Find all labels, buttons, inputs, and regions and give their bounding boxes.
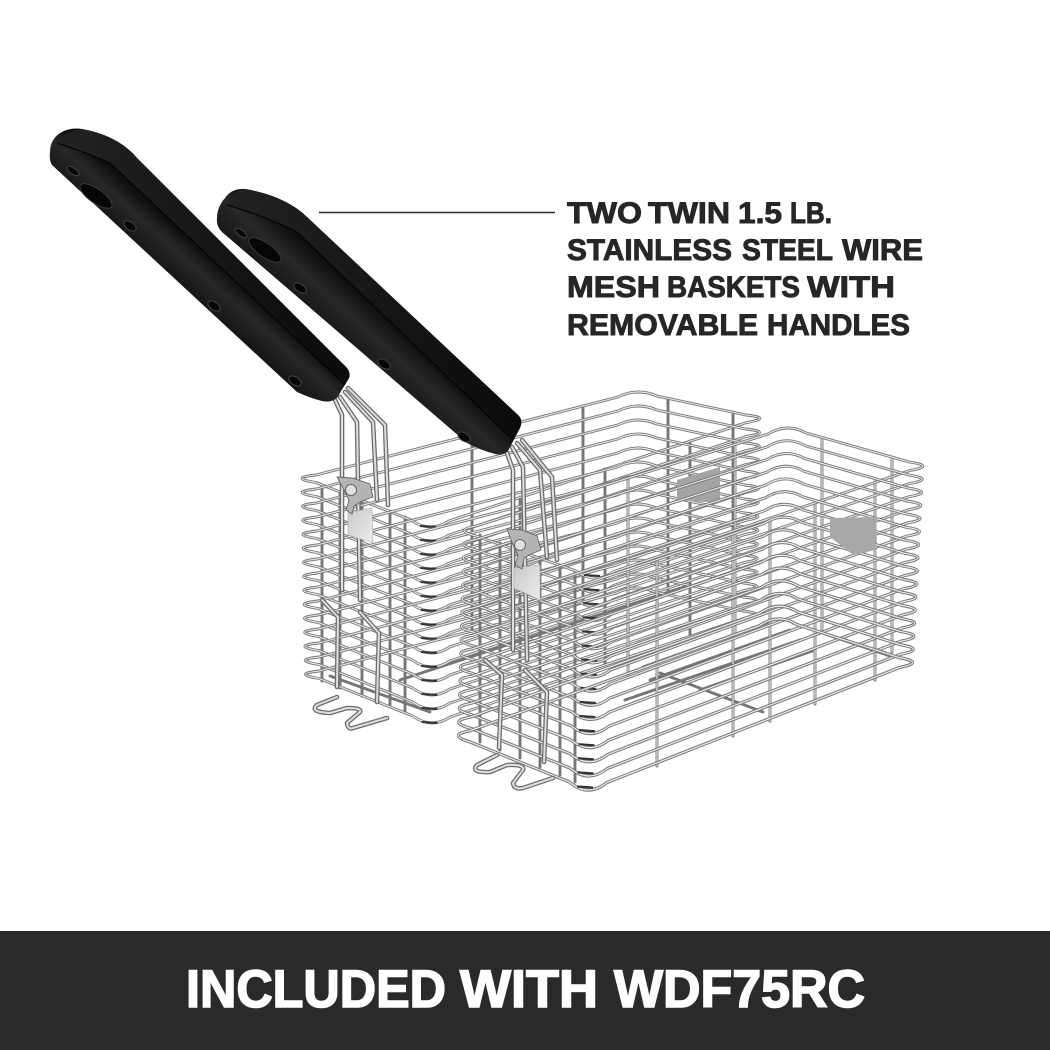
banner title: INCLUDED [186,960,446,1019]
callout text: TWIN [648,197,730,230]
callout text: STEEL [742,234,833,267]
callout text: LB. [790,197,832,230]
callout leader line [319,212,555,214]
rear wire basket [302,388,760,728]
front basket tag [830,517,877,555]
callout text: TWO [567,197,642,230]
banner title [186,960,865,1019]
front basket floor wires [625,623,893,712]
callout text: REMOVABLE [567,309,758,342]
rear basket handle rods [335,388,388,600]
front basket hook feet [475,755,553,788]
callout text: MESH [567,271,660,304]
left black handle [50,128,350,402]
callout text: HANDLES [767,309,910,342]
banner title: WDF75RC [614,960,865,1019]
front wire basket [458,428,923,790]
rear basket floor wires [330,585,690,712]
rear basket plate [348,508,373,543]
rear basket wire rings [302,392,760,723]
bottom banner [0,931,1050,1050]
front basket vertical wires [480,438,892,782]
rear basket legs [322,600,379,702]
front basket legs [485,660,547,762]
rear basket wing bolt [337,477,373,514]
callout text: STAINLESS [567,234,732,267]
callout text: BASKETS [667,271,800,304]
callout text: 1.5 [738,197,782,230]
front basket plate [514,565,540,600]
banner title: WITH [460,960,598,1019]
right black handle [217,189,521,455]
front basket handle rods [507,440,557,660]
rear basket hook feet [315,697,387,728]
callout text: WIRE [842,234,923,267]
rear basket tag [677,467,720,503]
rear basket vertical wires [322,399,733,713]
callout text: WITH [807,271,895,304]
front basket wing bolt [507,529,541,569]
front basket wire rings [458,428,923,790]
callout text [567,197,923,342]
